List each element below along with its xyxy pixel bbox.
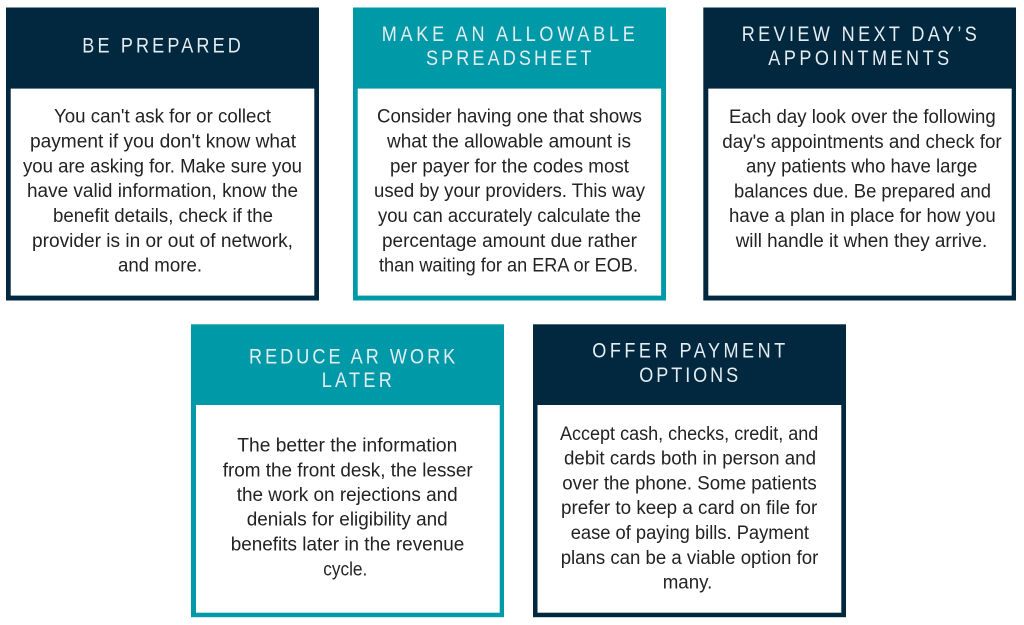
panel: be prepared [6, 8, 319, 300]
body text [223, 436, 473, 580]
panel body [196, 405, 500, 613]
body text: what the allowable amount is [386, 132, 631, 153]
body text: denials for eligibility and [247, 510, 448, 531]
body text [23, 107, 302, 276]
panel frame [533, 324, 846, 617]
body text [560, 424, 819, 593]
body text: provider is in or out of network, [32, 231, 293, 252]
body text: have valid information, know the [27, 181, 298, 202]
panel frame [191, 324, 504, 617]
heading: REVIEW NEXT DAY’S [742, 23, 977, 46]
body text: plans can be a viable option for [561, 548, 819, 569]
heading: MAKE AN ALLOWABLE [382, 23, 635, 46]
body text: Consider having one that shows [377, 107, 642, 128]
body text: per payer for the codes most [390, 156, 630, 177]
body text: used by your providers. This way [374, 181, 645, 202]
panel frame [353, 8, 666, 300]
body text: cycle. [323, 560, 367, 580]
body text: The better the information [237, 436, 457, 457]
heading [742, 23, 977, 70]
panel body [358, 89, 661, 296]
body text: you are asking for. Make sure you [23, 156, 302, 177]
body text: any patients who have large [746, 157, 977, 178]
heading [382, 23, 635, 70]
body text: the work on rejections and [237, 485, 458, 506]
body text: balances due. Be prepared and [734, 181, 991, 202]
panel frame [703, 8, 1016, 300]
body text: debit cards both in person and [564, 449, 816, 470]
heading: OPTIONS [639, 364, 738, 387]
body text: Each day look over the following [729, 107, 996, 128]
panel: make an allowable spreadsheet [353, 8, 666, 300]
body text: percentage amount due rather [382, 231, 638, 252]
heading: SPREADSHEET [426, 47, 591, 70]
heading [592, 339, 785, 387]
panel: offer payment options [533, 324, 846, 617]
body text: will handle it when they arrive. [735, 231, 987, 252]
panel frame [6, 8, 319, 300]
body text: you can accurately calculate the [378, 206, 641, 227]
panel: reduce AR work later [191, 324, 504, 617]
body text: over the phone. Some patients [562, 473, 817, 494]
heading: BE PREPARED [82, 34, 241, 58]
body text: payment if you don't know what [30, 132, 297, 153]
body text [374, 107, 645, 276]
body text: and more. [118, 256, 202, 276]
body text: Accept cash, checks, credit, and [560, 424, 818, 445]
body text: day's appointments and check for [722, 132, 1002, 153]
heading: APPOINTMENTS [768, 47, 949, 70]
heading: OFFER PAYMENT [592, 339, 785, 363]
body text: You can't ask for or collect [54, 107, 272, 128]
panel body [11, 89, 314, 296]
body text: from the front desk, the lesser [223, 460, 473, 481]
body text: many. [663, 572, 712, 593]
body text: than waiting for an ERA or EOB. [379, 256, 638, 276]
body text: ease of paying bills. Payment [571, 523, 810, 544]
body text: have a plan in place for how you [729, 206, 996, 227]
body text [722, 107, 1002, 252]
heading [249, 345, 455, 392]
panel body [708, 89, 1012, 296]
heading: LATER [322, 369, 392, 392]
body text: benefits later in the revenue [231, 535, 464, 556]
body text: prefer to keep a card on file for [561, 498, 818, 519]
body text: benefit details, check if the [53, 206, 273, 227]
panel: review next day's appointments [703, 8, 1016, 300]
panel body [538, 405, 841, 613]
heading: REDUCE AR WORK [249, 345, 455, 369]
